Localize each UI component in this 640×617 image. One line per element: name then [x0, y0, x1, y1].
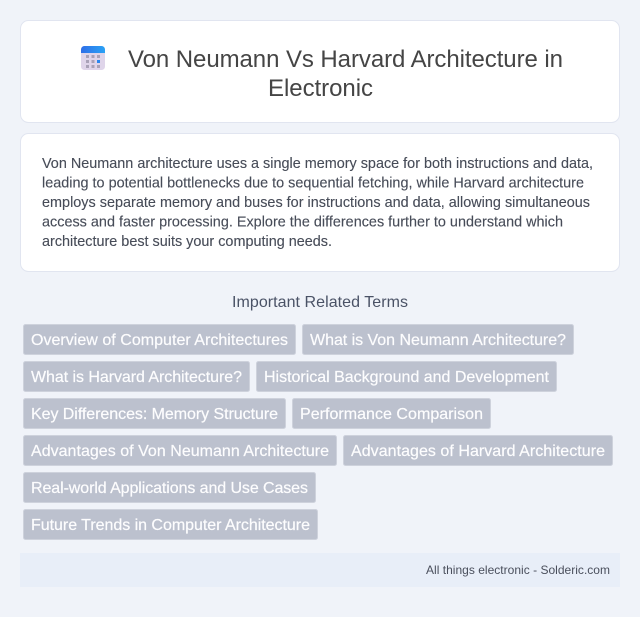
- panel: description: [20, 134, 620, 272]
- title: [128, 46, 563, 102]
- tag group: related terms: [24, 324, 612, 540]
- tag: applications: [24, 472, 316, 502]
- title: Von Neumann Vs Harvard Architecture in: [128, 46, 563, 73]
- text block: description paragraph: architecture best suits your computing needs.: [42, 234, 332, 250]
- text block: description paragraph: Von Neumann architecture uses a single memory space for both instructions and data,: [42, 156, 593, 172]
- tag: advantages von neumann: [24, 436, 336, 466]
- heading: important related terms: Important Related Terms: [232, 294, 408, 311]
- text block: description paragraph: leading to potential bottlenecks due to sequential fetching, while Harvard architecture: [42, 176, 584, 192]
- tag: future trends: [24, 510, 318, 540]
- tag: von neumann: What is Von Neumann Architecture?: [310, 332, 566, 349]
- tag: advantages harvard: Advantages of Harvard Architecture: [351, 443, 605, 460]
- title: Electronic: [268, 75, 373, 102]
- tag: advantages harvard: [344, 436, 612, 466]
- tag: performance: Performance Comparison: [300, 406, 483, 423]
- tag: overview: [24, 324, 296, 354]
- tag: overview: Overview of Computer Architectures: [31, 332, 288, 349]
- tag: key differences: [24, 398, 286, 428]
- tag: advantages von neumann: Advantages of Von Neumann Architecture: [31, 443, 329, 460]
- tag: applications: Real-world Applications and Use Cases: [31, 480, 308, 497]
- text block: description paragraph: employs separate memory and buses for instructions and data, allowing simultaneous: [42, 195, 590, 211]
- text block: description paragraph: access and faster processing. Explore the differences further to understand which: [42, 214, 563, 230]
- icon: calendar: [81, 46, 105, 70]
- tag: harvard: [24, 362, 250, 392]
- tag: history: [256, 362, 556, 392]
- tag: key differences: Key Differences: Memory Structure: [31, 406, 278, 423]
- footer: [20, 553, 620, 587]
- panel: title header: [20, 20, 620, 122]
- tag: future trends: Future Trends in Computer Architecture: [31, 517, 310, 534]
- tag: von neumann: [302, 324, 574, 354]
- text block: description paragraph: [42, 156, 593, 250]
- footer: All things electronic - Solderic.com: [426, 563, 610, 577]
- tag: history: Historical Background and Development: [264, 369, 550, 386]
- tag: performance: [292, 398, 490, 428]
- tag: harvard: What is Harvard Architecture?: [31, 369, 242, 386]
